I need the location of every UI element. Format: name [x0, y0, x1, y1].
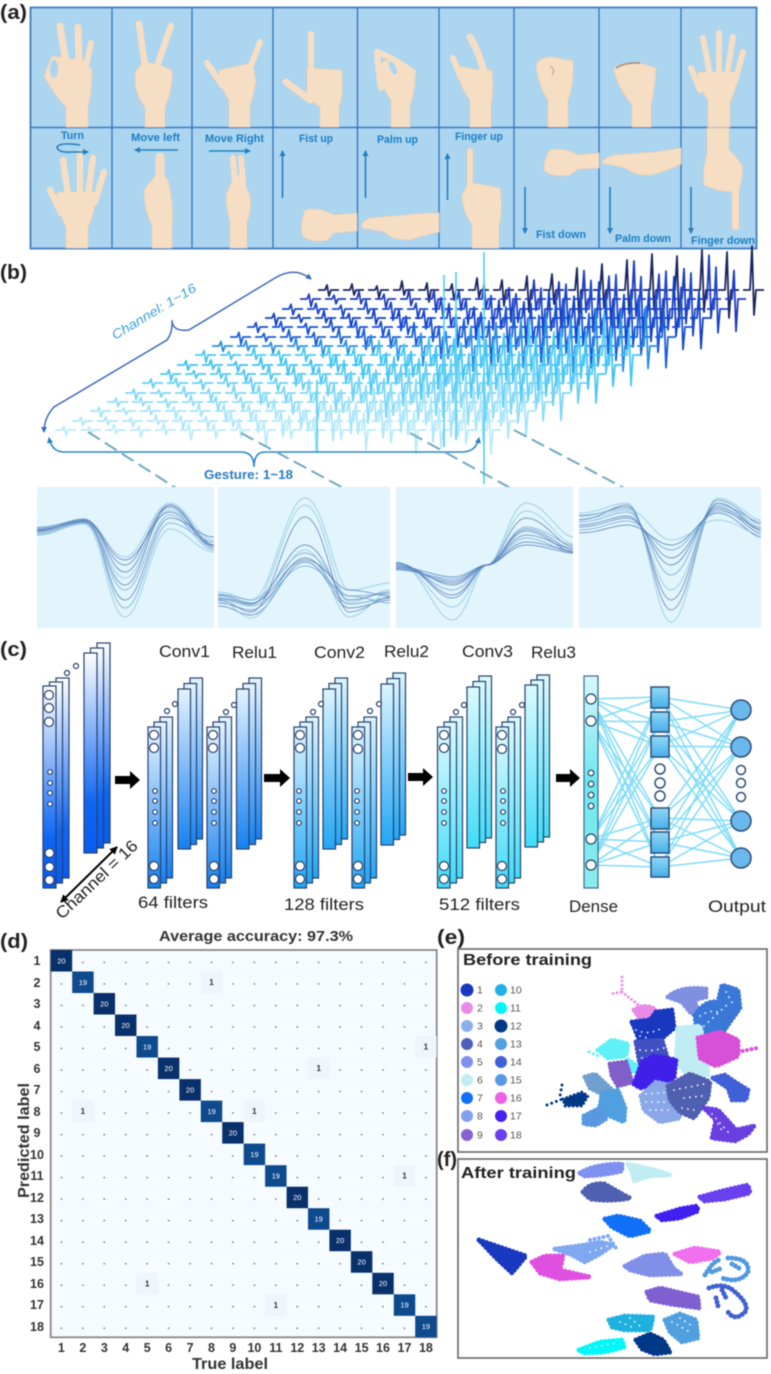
x-axis ticks: 1 — [58, 1341, 65, 1355]
diagonal cells: 20 — [164, 1064, 173, 1073]
x-axis ticks: 5 — [144, 1341, 151, 1355]
y-axis ticks: 6 — [34, 1062, 41, 1076]
y axis title: Predicted label — [16, 1083, 33, 1198]
hand: fist down end — [544, 149, 599, 176]
scatter clusters before training — [547, 977, 757, 1141]
diagonal cells: 20 — [357, 1258, 366, 1266]
scatter clusters after training — [479, 1164, 750, 1354]
misclassified cells: 1 — [274, 1301, 279, 1310]
diagonal cells: 20 — [57, 956, 66, 965]
stage labels: Output — [708, 898, 766, 916]
x-axis ticks — [58, 1341, 433, 1355]
legend: 8 — [477, 1110, 483, 1122]
x-axis ticks: 3 — [101, 1341, 108, 1355]
legend: 2 — [477, 1002, 483, 1014]
diagonal cells: 20 — [336, 1236, 344, 1245]
hand: turn end — [50, 153, 104, 248]
misclassified cells: 1 — [145, 1279, 150, 1288]
label: (a): (a) — [0, 2, 27, 24]
heading: After training — [461, 1165, 576, 1182]
label: (c): (c) — [0, 639, 27, 661]
x-axis ticks: 17 — [398, 1341, 411, 1355]
output nodes — [731, 700, 751, 868]
hand: finger up end — [462, 148, 501, 248]
y-axis ticks: 2 — [34, 976, 41, 990]
legend: 5 — [477, 1056, 483, 1068]
label: (b): (b) — [0, 262, 27, 284]
legend — [460, 984, 522, 1142]
stage labels: Conv3 — [462, 643, 513, 661]
misclassified cells: 1 — [402, 1172, 407, 1181]
misclassified cells — [72, 972, 437, 1316]
diagonal cells: 20 — [293, 1193, 301, 1202]
legend: 12 — [510, 1020, 522, 1032]
gesture names: Finger up — [455, 131, 503, 143]
gesture names: Move left — [131, 132, 180, 144]
heading: Before training — [463, 952, 592, 969]
legend: 4 — [477, 1038, 483, 1050]
y-axis ticks: 11 — [30, 1169, 44, 1183]
diagonal cells: 19 — [79, 978, 87, 987]
direction arrows — [57, 144, 691, 233]
gesture names: Palm up — [377, 134, 418, 146]
hand: palm down end — [602, 148, 681, 175]
stage labels: Relu2 — [384, 643, 429, 661]
waveform panel 1 — [37, 487, 214, 628]
gesture names: Fist down — [536, 229, 586, 241]
misclassified cells: 1 — [424, 1042, 429, 1052]
legend: 14 — [510, 1056, 522, 1068]
x-axis ticks: 4 — [122, 1341, 129, 1355]
hand: palm up end — [362, 213, 439, 240]
waveform panel 3 — [396, 487, 573, 628]
matrix background — [51, 950, 437, 1337]
stacks: Relu2 — [352, 673, 406, 888]
y-axis ticks: 5 — [34, 1040, 41, 1054]
stage labels: Conv2 — [314, 644, 365, 662]
stage labels — [138, 643, 766, 916]
diagonal cells: 20 — [379, 1279, 387, 1288]
y-axis ticks — [30, 954, 44, 1334]
legend: 13 — [510, 1038, 522, 1050]
hand: finger down end — [703, 128, 743, 230]
gesture names: Palm down — [615, 233, 671, 245]
diagonal cells: 19 — [272, 1172, 280, 1180]
panel (e): t-SNE before training — [437, 927, 767, 1152]
gesture names: Turn — [61, 130, 84, 142]
legend: 1 — [477, 984, 483, 996]
x-axis ticks: 14 — [333, 1341, 347, 1355]
diagonal cells — [51, 950, 437, 1337]
gesture grid background — [30, 8, 757, 248]
y-axis ticks: 16 — [30, 1277, 44, 1291]
gesture names: Finger down — [691, 235, 755, 247]
hand: move left end — [144, 157, 172, 248]
x-axis ticks: 13 — [312, 1341, 326, 1355]
x-axis ticks: 7 — [187, 1341, 194, 1355]
frame — [458, 1159, 767, 1358]
panel (f): t-SNE after training — [437, 1149, 767, 1358]
legend: 11 — [510, 1002, 521, 1014]
stacks: Relu1 — [207, 678, 262, 888]
y-axis ticks: 12 — [30, 1191, 44, 1205]
misclassified cells: 1 — [252, 1107, 257, 1116]
hand: move right start — [207, 42, 260, 127]
legend: 7 — [477, 1092, 483, 1104]
gesture names: Move Right — [205, 133, 264, 145]
panel (d): confusion matrix — [0, 929, 437, 1373]
legend: 6 — [477, 1074, 483, 1086]
y-axis ticks: 15 — [30, 1255, 44, 1269]
hand: palm up start — [377, 52, 415, 127]
legend: 9 — [477, 1130, 483, 1142]
diagonal cells: 20 — [186, 1085, 194, 1094]
stacks: Relu3 — [496, 675, 550, 888]
stage labels: 512 filters — [439, 896, 520, 914]
hand: finger down start — [691, 33, 743, 127]
channel label: Channel: 1~16 — [109, 280, 200, 343]
y-axis ticks: 18 — [30, 1320, 44, 1334]
diagonal cells: 19 — [143, 1042, 151, 1051]
panel (a): gesture photo grid — [0, 2, 757, 248]
stage labels: 128 filters — [284, 896, 364, 914]
x-axis ticks: 6 — [165, 1341, 172, 1355]
diagonal cells: 19 — [400, 1301, 409, 1310]
x-axis ticks: 10 — [247, 1341, 261, 1355]
gesture label: Gesture: 1~18 — [204, 467, 293, 482]
hand: fist up start — [286, 34, 342, 127]
x-axis ticks: 18 — [419, 1341, 433, 1355]
legend: 15 — [510, 1074, 522, 1086]
legend: 17 — [510, 1110, 522, 1122]
x-axis ticks: 8 — [208, 1341, 215, 1355]
y-axis ticks: 10 — [30, 1148, 44, 1162]
hand: turn start — [44, 26, 92, 127]
input stacks — [43, 643, 110, 888]
gesture names — [61, 130, 755, 247]
label: (d): (d) — [0, 931, 28, 953]
misclassified cells: 1 — [209, 978, 214, 987]
stage labels: Relu1 — [232, 644, 277, 662]
x axis title: True label — [192, 1356, 268, 1373]
x-axis ticks: 9 — [229, 1341, 236, 1355]
dense layer — [584, 676, 598, 888]
panel (c): CNN architecture — [0, 639, 766, 923]
gesture names: Fist up — [299, 133, 333, 145]
diagonal cells: 19 — [422, 1322, 430, 1331]
diagonal cells: 20 — [122, 1021, 130, 1030]
y-axis ticks: 17 — [30, 1298, 44, 1312]
legend: 18 — [510, 1130, 522, 1142]
label: (e): (e) — [437, 927, 465, 949]
hand: finger up start — [453, 37, 493, 127]
y-axis ticks: 4 — [34, 1019, 41, 1033]
misclassified cells: 1 — [316, 1064, 321, 1073]
gesture brace — [49, 438, 479, 467]
frame — [458, 949, 767, 1152]
waveform panel 2 — [218, 487, 390, 628]
x-axis ticks: 11 — [269, 1341, 282, 1355]
channel double arrow — [61, 847, 117, 902]
hidden layer squares — [651, 687, 669, 877]
hand: fist up end — [301, 209, 357, 241]
y-axis ticks: 7 — [34, 1083, 41, 1097]
hand: fist down start — [536, 57, 573, 127]
x-axis ticks: 2 — [79, 1341, 86, 1355]
legend: 16 — [510, 1092, 522, 1104]
y-axis ticks: 13 — [30, 1212, 44, 1226]
label: (f): (f) — [437, 1149, 457, 1171]
diagonal cells: 20 — [100, 999, 108, 1008]
diagonal cells: 19 — [207, 1107, 216, 1116]
panel (b): multichannel signal waterfall — [0, 246, 764, 628]
y-axis ticks: 14 — [30, 1234, 44, 1248]
y-axis ticks: 8 — [34, 1105, 41, 1119]
stacks: Conv1 — [148, 678, 202, 888]
stage labels: Dense — [569, 898, 618, 916]
dashed zoom guides — [88, 430, 624, 490]
stage labels: Relu3 — [531, 644, 576, 662]
misclassified cells: 1 — [81, 1107, 86, 1116]
hand: move left start — [135, 24, 172, 127]
waterfall signal rows — [55, 246, 764, 484]
stage labels: Conv1 — [159, 643, 210, 661]
chart title: Average accuracy: 97.3% — [159, 929, 353, 945]
diagonal cells: 19 — [250, 1150, 259, 1159]
diagonal cells: 19 — [315, 1214, 323, 1224]
dense network connections — [591, 697, 741, 867]
stage labels: 64 filters — [138, 894, 208, 912]
x-axis ticks: 15 — [355, 1341, 369, 1355]
x-axis ticks: 12 — [290, 1341, 304, 1355]
channel brace — [44, 272, 311, 432]
diagonal cells: 20 — [229, 1128, 237, 1137]
legend: 10 — [510, 984, 522, 996]
waveform panel 4 — [579, 487, 761, 628]
channel label: Channel = 16 — [52, 837, 142, 923]
y-axis ticks: 3 — [34, 997, 41, 1011]
hand: move right end — [226, 158, 251, 248]
y-axis ticks: 1 — [34, 954, 41, 968]
arrows between stages — [115, 768, 580, 789]
hand: palm down start — [614, 63, 656, 127]
stacks: Conv2 — [294, 678, 348, 888]
y-axis ticks: 9 — [34, 1126, 41, 1140]
stacks: Conv3 — [438, 676, 492, 888]
legend: 3 — [477, 1020, 483, 1032]
x-axis ticks: 16 — [376, 1341, 390, 1355]
